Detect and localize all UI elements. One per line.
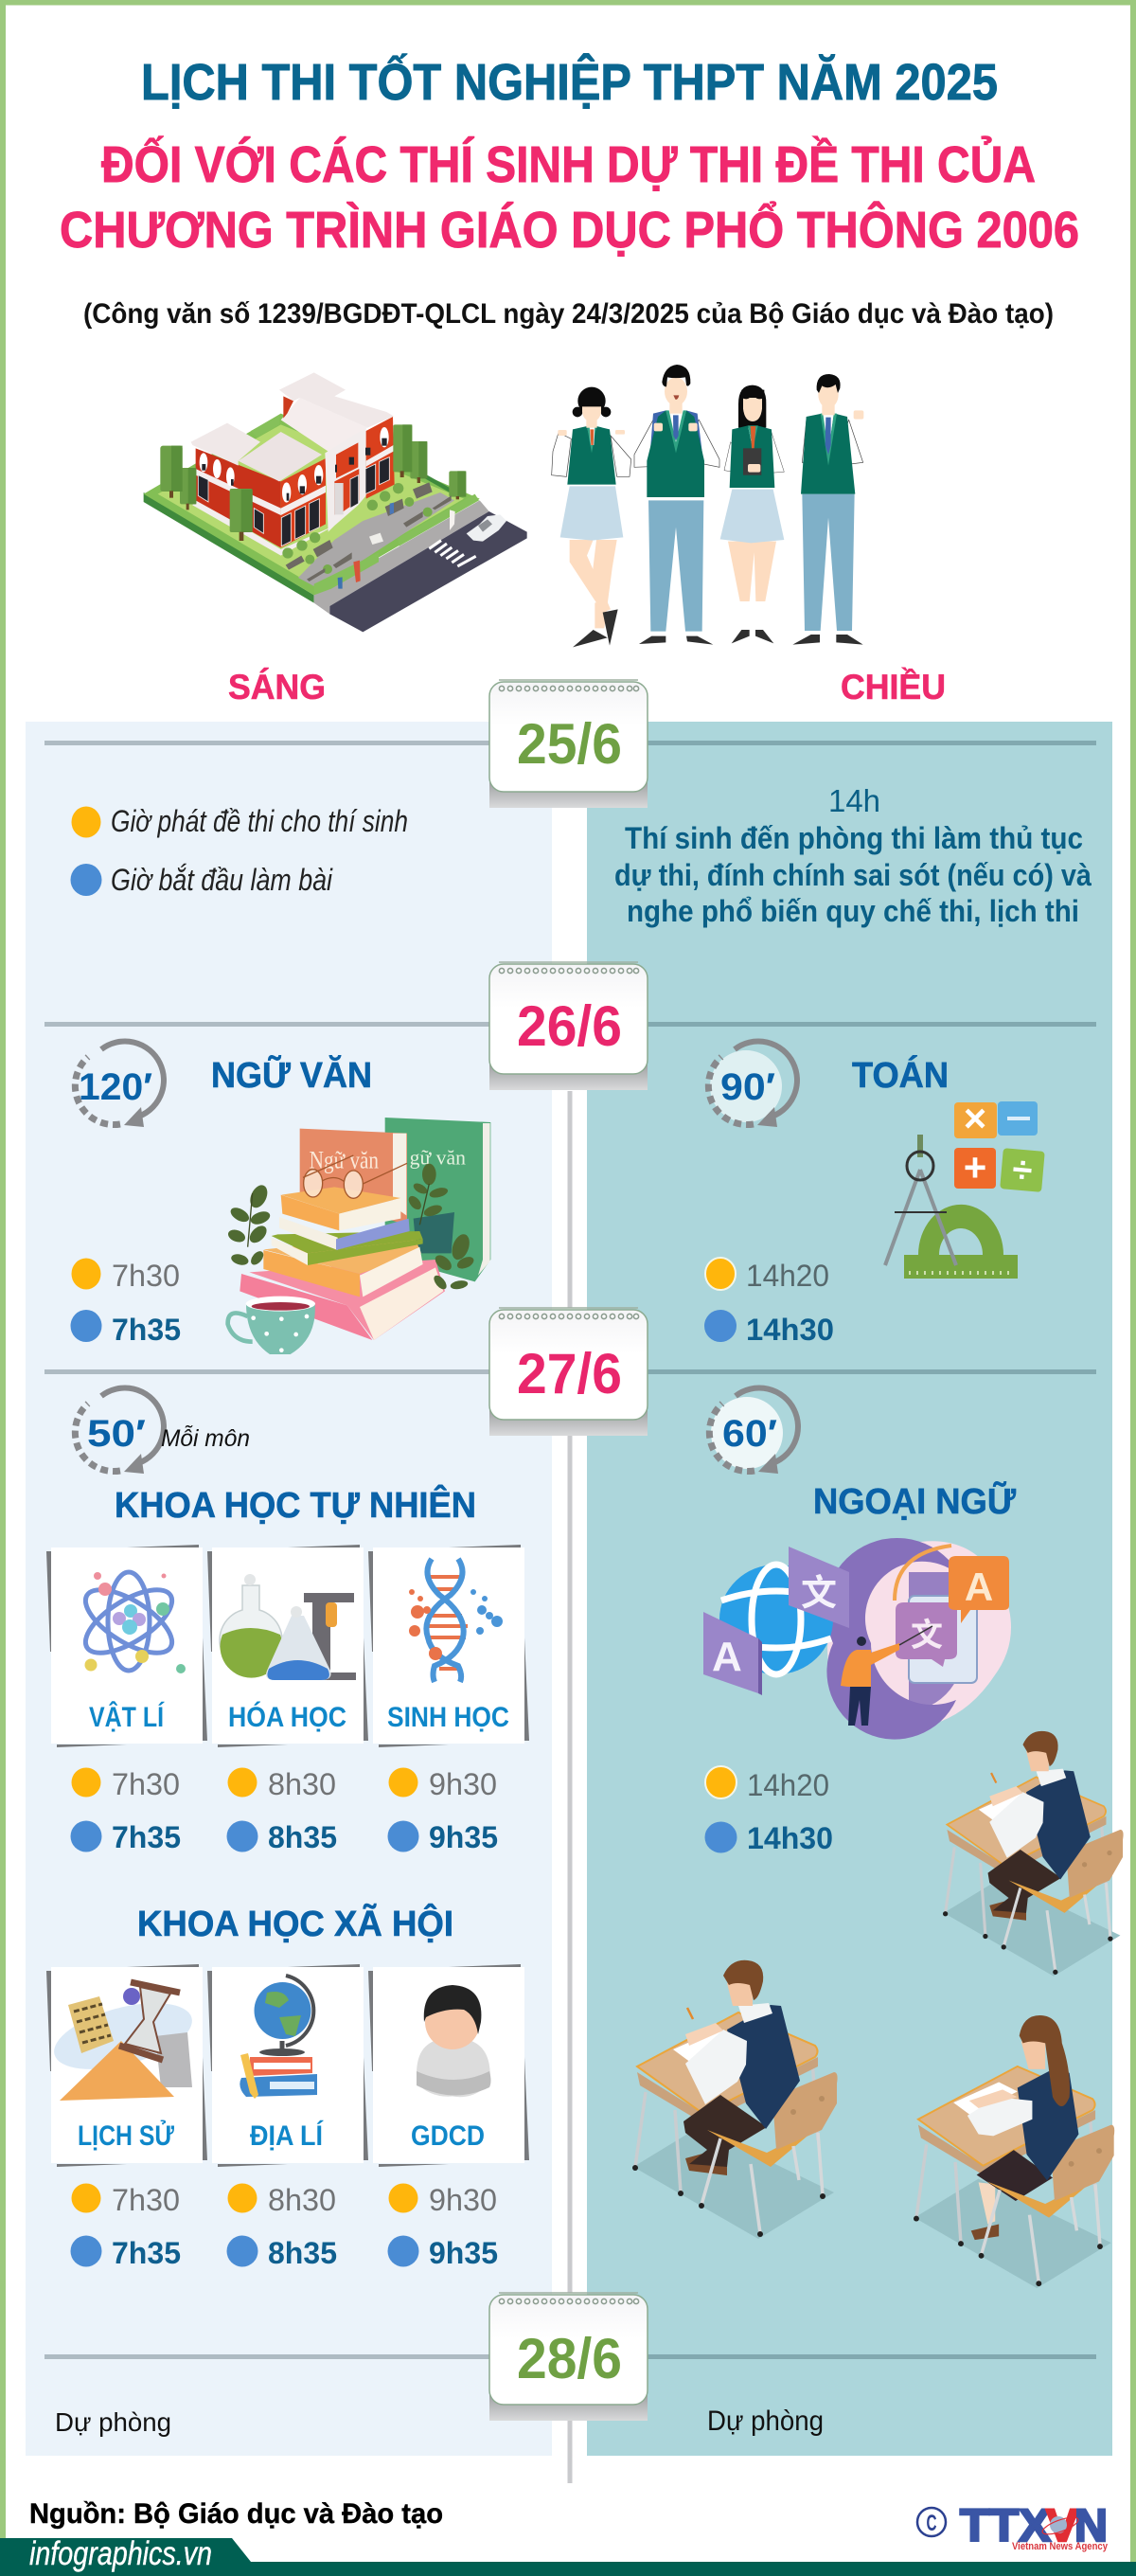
label: VẬT LÍ bbox=[89, 1701, 165, 1733]
label: LỊCH SỬ bbox=[78, 2120, 174, 2152]
start time: 14h30 bbox=[746, 1313, 834, 1347]
note time: 14h bbox=[828, 783, 880, 818]
heading: natural sciences: KHOA HỌC TỰ NHIÊN bbox=[115, 1484, 476, 1526]
teacher bbox=[841, 1626, 932, 1726]
timer 120 minutes bbox=[75, 1042, 164, 1127]
yellow dots bbox=[72, 2184, 418, 2212]
title bbox=[60, 53, 1079, 259]
calendar 28/6 bbox=[489, 2293, 648, 2421]
calendar 25/6 bbox=[489, 680, 648, 808]
yellow dot bbox=[705, 1258, 736, 1290]
blue dots bbox=[70, 2235, 418, 2267]
start times: 7h35 bbox=[112, 1820, 181, 1854]
start time: 7h35 bbox=[112, 1313, 181, 1347]
document bbox=[909, 1596, 977, 1683]
subtitle: official document: (Công văn số 1239/BGDĐT-QLCL ngày 24/3/2025 của Bộ Giáo dục và Đào tạo) bbox=[83, 298, 1054, 330]
blue dot bbox=[704, 1310, 737, 1342]
source: Nguồn: Bộ Giáo dục và Đào tạo bbox=[29, 2498, 443, 2530]
globe bbox=[719, 1565, 833, 1674]
speech bubble A: A bbox=[965, 1565, 993, 1609]
distribution time: 7h30 bbox=[112, 1259, 180, 1293]
icon: hourglass and monuments bbox=[47, 1982, 199, 2101]
header: morning: SÁNG bbox=[228, 668, 326, 707]
illustration: girl at desk, right bbox=[914, 2015, 1114, 2288]
date separators right bbox=[648, 741, 1096, 2359]
timer 120 minutes: 120′ bbox=[79, 1066, 152, 1108]
purple ring bbox=[825, 1538, 961, 1740]
card: geography bbox=[207, 1964, 368, 2167]
illustration: four students in uniform bbox=[552, 365, 863, 647]
pink blob bbox=[827, 1541, 1011, 1728]
icon: atom bbox=[76, 1572, 186, 1673]
illustration: language learning bbox=[703, 1538, 1011, 1740]
illustration: student at desk, left bbox=[632, 1960, 838, 2239]
protractor bbox=[904, 1205, 1018, 1279]
start times: 9h35 bbox=[429, 2236, 498, 2270]
reserve note: right: Dự phòng bbox=[707, 2406, 824, 2437]
legend: question distribution: Giờ phát đề thi cho thí sinh bbox=[111, 804, 408, 838]
distribution times: 7h30 bbox=[112, 2183, 180, 2217]
distribution times bbox=[112, 1767, 497, 1801]
card: physics bbox=[46, 1545, 207, 1747]
speech bubble A bbox=[949, 1556, 1009, 1623]
calendar 27/6: 27/6 bbox=[517, 1342, 622, 1405]
boy 1 bbox=[634, 365, 719, 645]
blue dot bbox=[70, 1310, 102, 1342]
speech bubble wen bbox=[896, 1602, 957, 1667]
panel: afternoon column bbox=[587, 722, 1112, 2456]
multiply tile: × bbox=[964, 1096, 986, 1140]
plus tile bbox=[954, 1145, 996, 1190]
blue dots bbox=[70, 1820, 418, 1852]
agency wordmark: V bbox=[1046, 2501, 1078, 2551]
divide tile bbox=[1000, 1148, 1045, 1192]
25/6 afternoon note bbox=[614, 783, 1092, 928]
timer 90 minutes bbox=[708, 1042, 797, 1127]
blue dot bbox=[704, 1822, 737, 1852]
illustration: stack of literature books bbox=[226, 1118, 490, 1354]
block wen bbox=[789, 1547, 849, 1628]
calendar 28/6: 28/6 bbox=[517, 2327, 622, 2390]
girl 2 with book bbox=[720, 385, 784, 643]
agency wordmark: N bbox=[1074, 2501, 1108, 2551]
illustration: stack of literature books: gữ văn bbox=[410, 1145, 466, 1169]
icon: flasks bbox=[220, 1574, 356, 1680]
note: per subject: Mỗi môn bbox=[161, 1424, 250, 1452]
block A: A bbox=[712, 1634, 742, 1680]
label: SINH HỌC bbox=[387, 1702, 509, 1733]
calendar 27/6 bbox=[489, 1308, 648, 1436]
minus tile bbox=[998, 1101, 1038, 1136]
yellow dot bbox=[72, 1258, 100, 1290]
reserve note: left: Dự phòng bbox=[55, 2407, 171, 2437]
card: civics bbox=[368, 1964, 529, 2167]
orange arrow bbox=[895, 1546, 951, 1601]
icon: person bbox=[416, 1985, 490, 2098]
compass bbox=[885, 1135, 956, 1265]
distribution times: 9h30 bbox=[429, 1767, 497, 1801]
subject: Toan: TOÁN bbox=[852, 1054, 949, 1096]
distribution times: 7h30 bbox=[112, 1767, 180, 1801]
boy 2 bbox=[792, 374, 863, 645]
illustration: math tools bbox=[885, 1096, 1045, 1279]
calendar 26/6 bbox=[489, 962, 648, 1090]
time: Ngu van bbox=[70, 1258, 181, 1347]
legend: blue dot bbox=[70, 864, 102, 896]
agency wordmark: TTX bbox=[960, 2501, 1051, 2551]
distribution time: 14h20 bbox=[746, 1259, 829, 1293]
times: natural sciences bbox=[70, 1767, 498, 1854]
note line 3: nghe phổ biến quy chế thi, lịch thi bbox=[627, 894, 1079, 928]
time: Toan bbox=[704, 1258, 834, 1347]
divide tile: ÷ bbox=[1011, 1150, 1034, 1191]
calendar 25/6: 25/6 bbox=[517, 712, 622, 776]
start times bbox=[112, 1820, 498, 1854]
header: afternoon: CHIỀU bbox=[841, 668, 946, 707]
icon: DNA bbox=[409, 1559, 503, 1682]
illustration: school building bbox=[144, 372, 527, 632]
legend: start time: Giờ bắt đầu làm bài bbox=[111, 863, 333, 897]
timer 60 minutes: 60′ bbox=[722, 1413, 777, 1455]
heading: social sciences: KHOA HỌC XÃ HỘI bbox=[137, 1902, 453, 1944]
card: biology bbox=[368, 1545, 529, 1747]
plus tile: + bbox=[964, 1145, 986, 1190]
copyright mark: C bbox=[926, 2511, 937, 2536]
multiply tile bbox=[954, 1096, 997, 1140]
logo: TTXVN bbox=[917, 2501, 1109, 2552]
agency emblem bbox=[1040, 2514, 1080, 2537]
distribution times: 9h30 bbox=[429, 2183, 497, 2217]
label: ĐỊA LÍ bbox=[250, 2120, 324, 2152]
subject: foreign language: NGOẠI NGỮ bbox=[813, 1480, 1016, 1522]
illustration: student at desk, top right bbox=[943, 1731, 1124, 1977]
timer 50 minutes: 50′ bbox=[87, 1413, 146, 1455]
footer bar bbox=[0, 2538, 1136, 2576]
timer 90 minutes: 90′ bbox=[720, 1066, 775, 1108]
agency name: Vietnam News Agency bbox=[1012, 2541, 1109, 2552]
card: chemistry bbox=[207, 1545, 368, 1747]
note line 1: Thí sinh đến phòng thi làm thủ tục bbox=[625, 821, 1083, 855]
label: GDCD bbox=[411, 2120, 485, 2152]
distribution times bbox=[112, 2183, 497, 2217]
yellow dot bbox=[705, 1766, 737, 1798]
icon: globe and books bbox=[240, 1976, 317, 2099]
timer 60 minutes bbox=[709, 1388, 798, 1474]
speech bubble wen: 文 bbox=[911, 1609, 943, 1655]
copyright mark bbox=[917, 2508, 946, 2536]
times: social sciences bbox=[70, 2183, 498, 2270]
calendar 26/6: 26/6 bbox=[517, 994, 622, 1058]
legend bbox=[70, 804, 408, 897]
distribution times: 8h30 bbox=[268, 1767, 336, 1801]
time: foreign language bbox=[704, 1766, 833, 1855]
footer website: infographics.vn bbox=[29, 2535, 212, 2572]
start times: 8h35 bbox=[268, 2236, 337, 2270]
start times: 7h35 bbox=[112, 2236, 181, 2270]
distribution times: 8h30 bbox=[268, 2183, 336, 2217]
start times: 8h35 bbox=[268, 1820, 337, 1854]
start times: 9h35 bbox=[429, 1820, 498, 1854]
title line 1: LỊCH THI TỐT NGHIỆP THPT NĂM 2025 bbox=[141, 53, 998, 111]
yellow dots bbox=[72, 1767, 418, 1798]
block wen: 文 bbox=[801, 1564, 837, 1616]
block A bbox=[703, 1612, 762, 1695]
timer 50 minutes bbox=[75, 1388, 164, 1474]
panel: morning column bbox=[26, 722, 552, 2456]
start times bbox=[112, 2236, 498, 2270]
card: history bbox=[46, 1964, 207, 2167]
girl 1 bbox=[552, 387, 631, 647]
agency wordmark bbox=[960, 2501, 1108, 2551]
illustration: stack of literature books: Ngữ văn bbox=[310, 1146, 379, 1173]
legend: yellow dot bbox=[72, 807, 100, 837]
start time: 14h30 bbox=[747, 1821, 833, 1855]
center timeline bbox=[568, 1091, 572, 2483]
subject: Ngu van: NGỮ VĂN bbox=[211, 1054, 372, 1096]
title line 2: ĐỐI VỚI CÁC THÍ SINH DỰ THI ĐỀ THI CỦA bbox=[101, 136, 1036, 193]
date separators bbox=[44, 741, 489, 2359]
note line 2: dự thi, đính chính sai sót (nếu có) và bbox=[614, 858, 1092, 892]
label: HÓA HỌC bbox=[228, 1701, 346, 1733]
distribution time: 14h20 bbox=[747, 1768, 829, 1802]
